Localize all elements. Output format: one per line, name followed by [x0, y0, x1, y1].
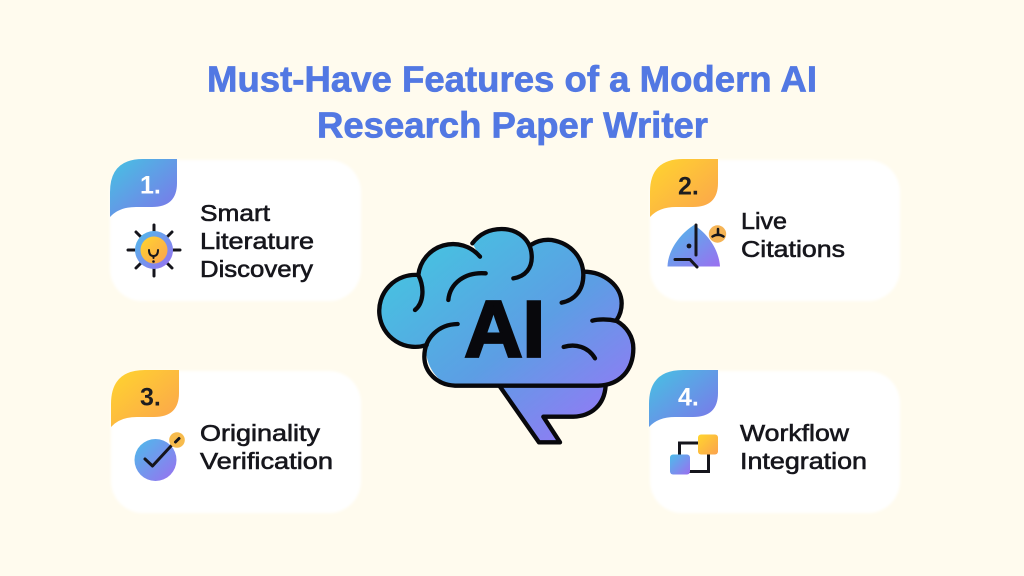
number tab 2 [650, 159, 718, 217]
number tab 1: 1. [140, 172, 161, 200]
brain fill [379, 229, 633, 442]
number tab 3 [111, 370, 179, 427]
label: Smart Literature Discovery: Smart [200, 200, 271, 226]
number tab 1 [110, 159, 177, 217]
title: Research Paper Writer [317, 104, 708, 146]
label: Originality Verification: Originality [200, 420, 320, 446]
icon: citation sail [668, 225, 726, 267]
label: Smart Literature Discovery: Literature [200, 228, 314, 254]
panel: Live Citations [650, 159, 900, 301]
label: Live Citations: Live [741, 208, 787, 234]
title: Must-Have Features of a Modern AI [207, 58, 817, 100]
icon: sun [128, 225, 180, 276]
panel: Workflow Integration [649, 370, 900, 513]
label: Workflow Integration [740, 420, 867, 474]
title [207, 58, 817, 146]
brain AI text: AI [464, 285, 545, 374]
number tab 2: 2. [678, 172, 699, 200]
panel: Originality Verification [111, 370, 361, 513]
number tab 4 [649, 370, 718, 427]
label: Live Citations: Citations [741, 236, 845, 262]
label: Workflow Integration: Workflow [740, 420, 850, 446]
label: Live Citations [741, 208, 845, 262]
panel: Smart Literature Discovery [110, 159, 361, 301]
label: Workflow Integration: Integration [740, 448, 867, 474]
label: Smart Literature Discovery [200, 200, 314, 282]
label: Originality Verification [200, 420, 333, 474]
label: Originality Verification: Verification [200, 448, 333, 474]
icon: linked squares [670, 434, 718, 474]
number tab 3: 3. [140, 384, 161, 412]
icon: check badge [134, 432, 185, 481]
number tab 4: 4. [678, 384, 699, 412]
brain outline [379, 229, 633, 442]
label: Smart Literature Discovery: Discovery [200, 256, 313, 282]
central AI brain [379, 229, 633, 442]
